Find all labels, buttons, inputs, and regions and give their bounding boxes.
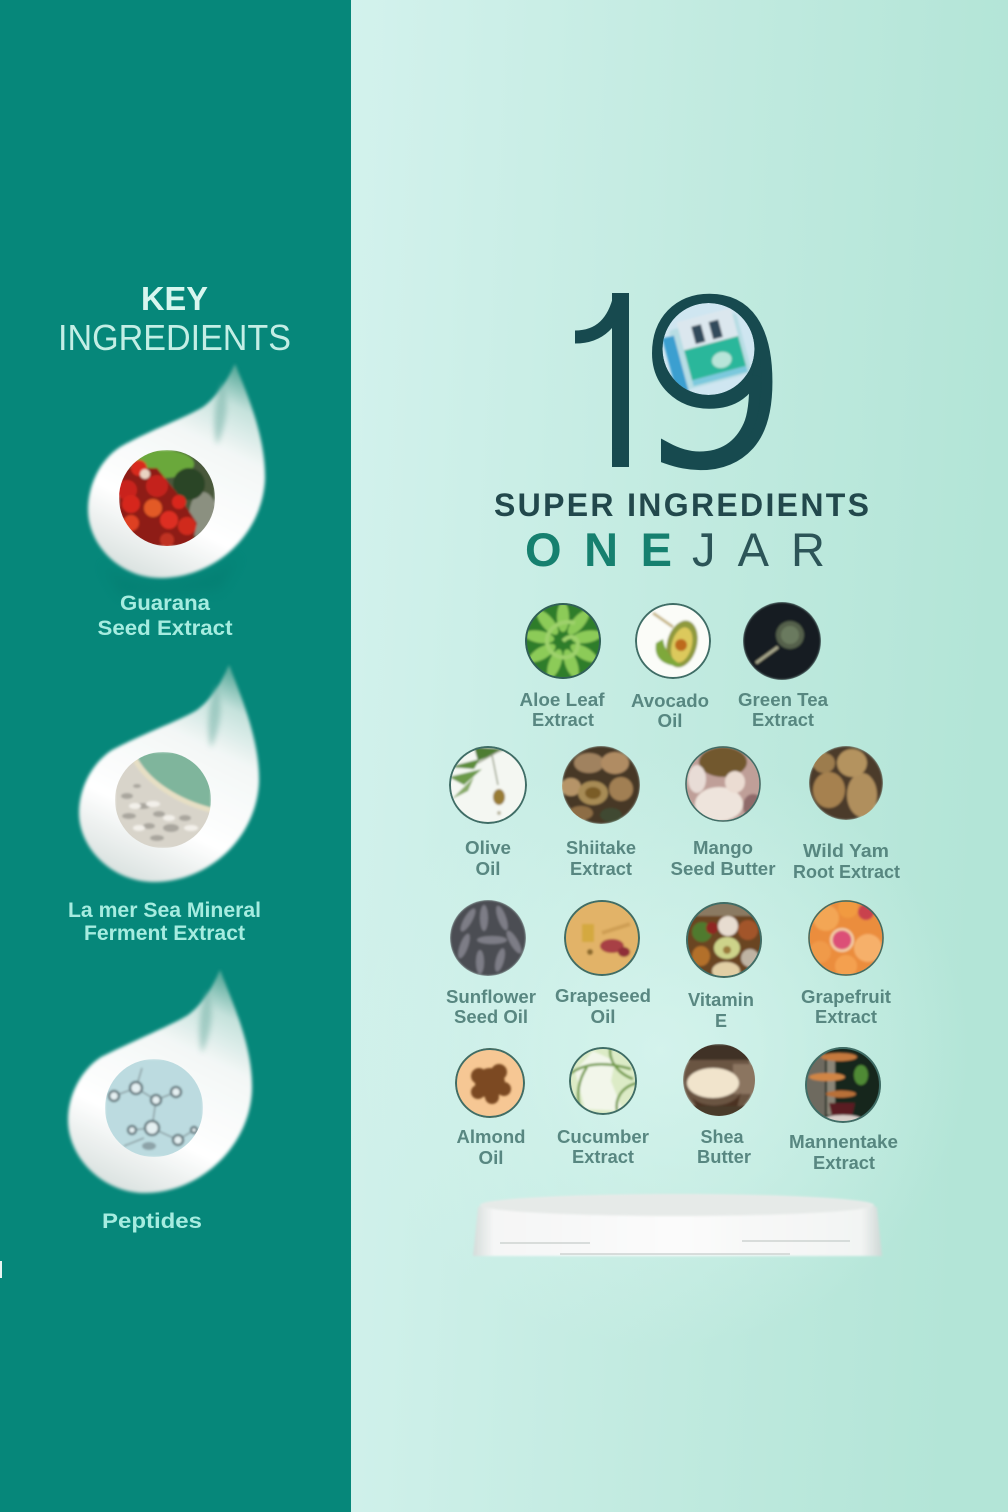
jar lid [473,1194,882,1256]
ingredient: green tea: Extract [752,710,814,730]
ingredient: green tea: Green Tea [738,690,829,710]
ingredient: olive oil: Olive [465,838,511,858]
ingredient: shea butter: Butter [697,1147,751,1167]
jar thumbnail [659,303,754,395]
ingredient: wild yam: Wild Yam [803,841,889,861]
ingredient: shiitake: Extract [570,859,632,879]
ingredient: mango seed butter [670,746,776,879]
digit 1: 1 [558,258,698,514]
ingredient: mannentake: Mannentake [789,1132,898,1152]
ingredient: aloe leaf: Aloe Leaf [520,690,606,710]
ingredient drop: la mer sea mineral: Ferment Extract [84,922,245,945]
one: ONE [525,523,672,576]
digit 1 [575,293,629,467]
ingredient: almond: Almond [456,1127,526,1147]
ingredient: grapeseed: Grapeseed [555,986,651,1006]
ingredient: sunflower seed: Sunflower [446,987,536,1007]
jar: JAR [692,523,825,576]
left teal panel [0,0,351,1512]
ingredient: grapefruit: Grapefruit [801,987,891,1007]
ingredient drop: guarana [88,364,265,640]
drop shape [79,665,259,882]
title text [494,487,869,576]
ingredient: wild yam: Root Extract [793,862,900,882]
ingredient: mannentake [789,1047,898,1173]
ingredient: aloe leaf: Extract [532,710,594,730]
drop shape [68,970,252,1193]
ingredient: avocado [631,603,711,731]
ingredient: avocado: Avocado [631,691,709,711]
ingredient: shiitake: Shiitake [566,838,636,858]
ingredient: grapefruit [801,898,891,1027]
ingredient: mannentake: Extract [813,1153,875,1173]
big number 19 [575,293,772,470]
photo: molecules [105,1059,203,1157]
photo: sea and sand [115,752,211,848]
ingredient drop: la mer sea mineral [68,665,261,945]
heading: key ingredients: INGREDIENTS [58,317,291,358]
ingredient: cucumber: Extract [572,1147,634,1167]
right background panel [350,0,1008,1512]
ingredient drop: guarana: Seed Extract [98,617,233,640]
ingredient: shiitake [561,746,640,879]
ingredient: vitamin e [686,902,762,1031]
ingredient: shea butter: Shea [700,1127,744,1147]
ingredient: aloe leaf [520,602,606,730]
ingredient: vitamin e: E [715,1011,727,1031]
ingredient: sunflower seed: Seed Oil [454,1007,528,1027]
ingredient drop: peptides [68,970,252,1233]
ingredient: grapefruit: Extract [815,1007,877,1027]
ingredient: olive oil: Oil [476,859,500,879]
ingredient: green tea [738,602,829,730]
label: Guarana [120,592,210,615]
ingredient: olive oil [449,746,527,879]
drop shape [88,364,265,595]
ingredient: cucumber: Cucumber [557,1127,649,1147]
ingredient: grapeseed [555,900,651,1027]
digit 9: 9 [634,257,788,514]
label: La mer Sea Mineral [68,899,261,922]
ingredient: shea butter [683,1044,757,1167]
title text: SUPER INGREDIENTS [494,487,869,523]
ingredient: sunflower seed [446,900,536,1027]
ingredient: avocado: Oil [658,711,682,731]
ingredient: vitamin e: Vitamin [688,990,754,1010]
heading: key ingredients [58,280,291,358]
heading: key ingredients: KEY [141,280,208,317]
ingredient: grapeseed: Oil [590,1007,616,1027]
label: Peptides [102,1210,202,1233]
photo: guarana berries [117,450,217,547]
ingredient: almond [455,1048,526,1168]
ingredient: cucumber [557,1045,649,1167]
ingredient: mango seed butter: Mango [693,838,753,858]
ingredient: wild yam [793,746,900,882]
left edge mark [0,1261,2,1278]
ingredient: mango seed butter: Seed Butter [670,859,776,879]
ingredient: almond: Oil [478,1148,504,1168]
